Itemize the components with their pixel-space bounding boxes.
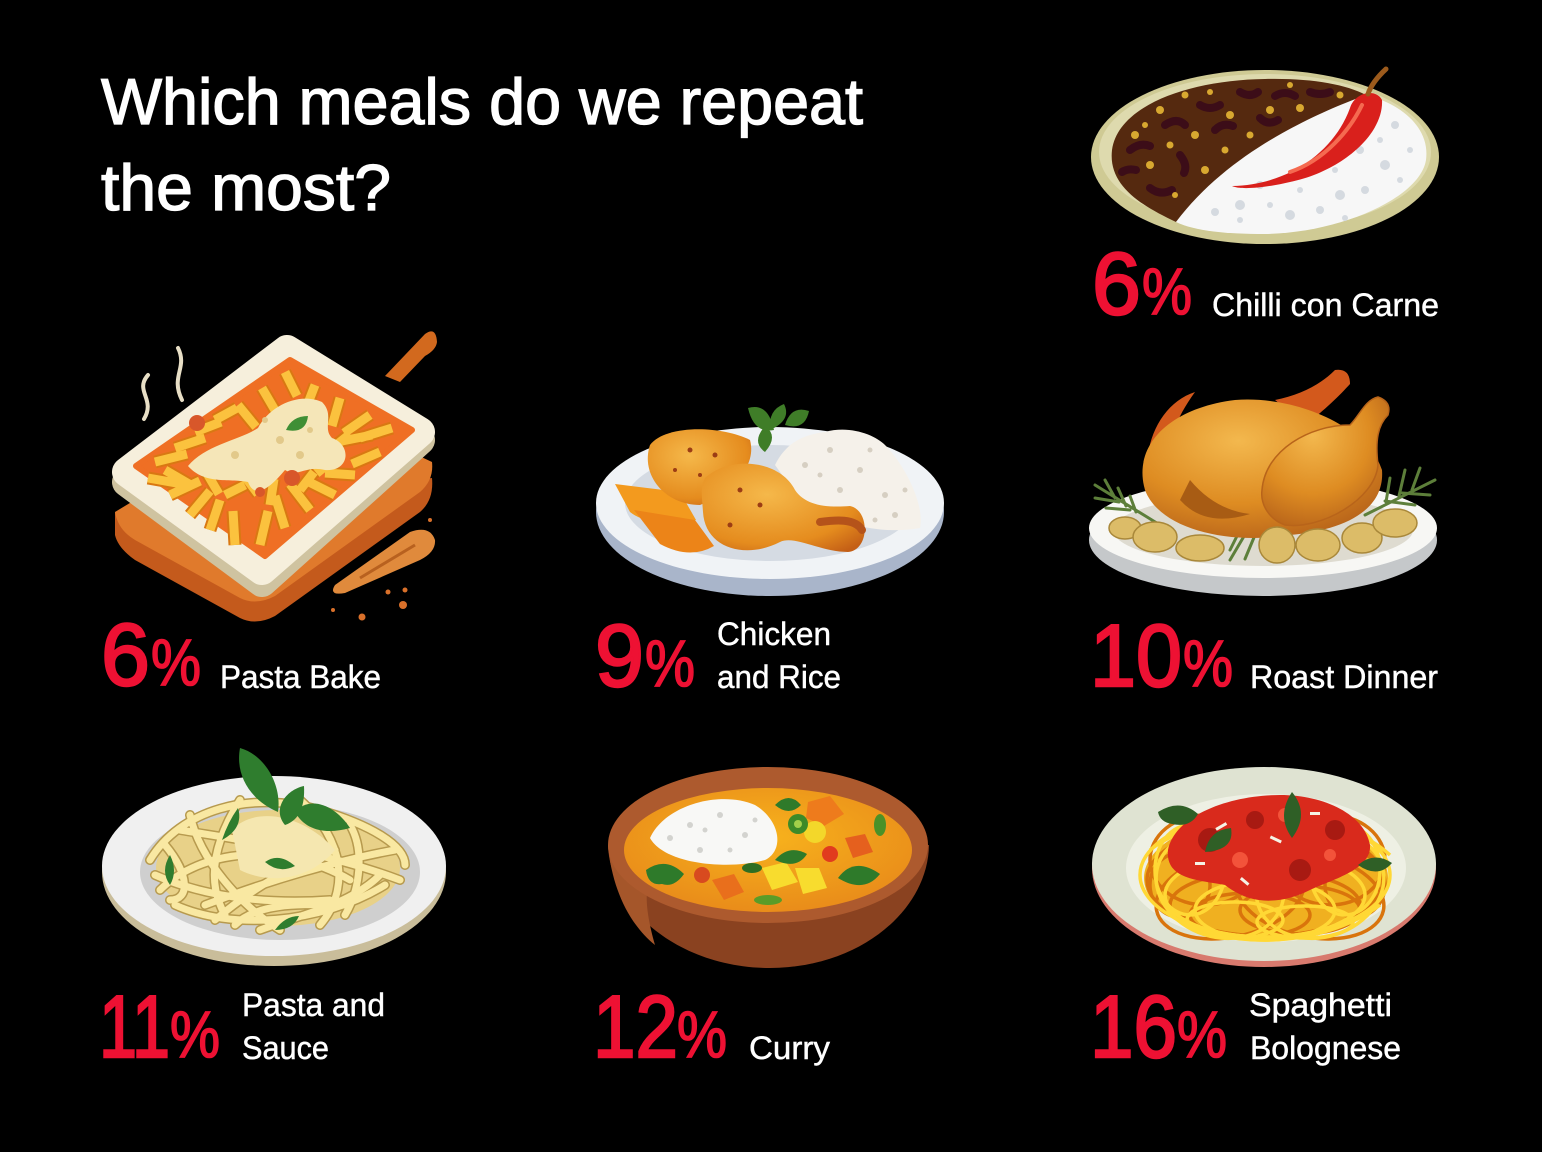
title: [101, 65, 863, 224]
label: chicken and rice: Chicken: [717, 616, 831, 652]
label: pasta and sauce: Pasta and: [242, 987, 385, 1023]
label: spaghetti bolognese: Spaghetti: [1249, 987, 1392, 1023]
title: the most?: [101, 151, 391, 224]
stat: pasta sauce percent: 11: [99, 977, 170, 1076]
icon: roast chicken: [1089, 370, 1437, 596]
label: pasta and sauce: [242, 987, 385, 1066]
stat: curry percent: %: [677, 997, 727, 1071]
stat: pasta bake percent: [101, 605, 201, 704]
label: spaghetti bolognese: [1249, 987, 1401, 1066]
title: Which meals do we repeat: [101, 65, 863, 138]
stat: roast percent: [1090, 606, 1233, 705]
stat: pasta bake percent: %: [151, 625, 201, 699]
icon: chilli plate: [1091, 69, 1439, 244]
panel: roast dinner: [1089, 370, 1438, 705]
icon: pasta bake dish: [115, 331, 437, 622]
stat: pasta bake percent: 6: [101, 605, 150, 704]
label: pasta bake: Pasta Bake: [220, 659, 381, 695]
stat: pasta sauce percent: %: [170, 997, 220, 1071]
stat: chilli percent: %: [1142, 254, 1192, 328]
icon: pasta and sauce plate: [102, 748, 446, 966]
label: curry: Curry: [749, 1030, 830, 1066]
stat: chilli percent: [1092, 234, 1192, 333]
icon: curry bowl: [608, 767, 929, 968]
label: pasta and sauce: Sauce: [242, 1030, 329, 1066]
stat: chicken percent: [595, 606, 695, 705]
stat: chicken percent: 9: [595, 606, 644, 705]
icon: spaghetti plate: [1092, 767, 1436, 967]
stat: chicken percent: %: [645, 626, 695, 700]
label: spaghetti bolognese: Bolognese: [1250, 1030, 1401, 1066]
panel: curry: [593, 767, 929, 1076]
panel: pasta bake: [101, 331, 437, 704]
icon: chicken and rice plate: [596, 404, 944, 596]
label: roast dinner: Roast Dinner: [1250, 659, 1438, 695]
panel: pasta and sauce: [99, 748, 446, 1076]
stat: curry percent: 12: [593, 977, 678, 1076]
label: chicken and rice: [717, 616, 841, 695]
label: chilli con carne: Chilli con Carne: [1212, 287, 1439, 323]
panel: chicken and rice: [595, 404, 944, 705]
panel: chilli con carne: [1091, 69, 1439, 333]
stat: spaghetti percent: 16: [1090, 977, 1177, 1076]
stat: roast percent: %: [1183, 626, 1233, 700]
stat: spaghetti percent: %: [1177, 997, 1227, 1071]
panel: spaghetti bolognese: [1090, 767, 1436, 1076]
label: chicken and rice: and Rice: [717, 659, 841, 695]
stat: chilli percent: 6: [1092, 234, 1141, 333]
stat: roast percent: 10: [1090, 606, 1182, 705]
